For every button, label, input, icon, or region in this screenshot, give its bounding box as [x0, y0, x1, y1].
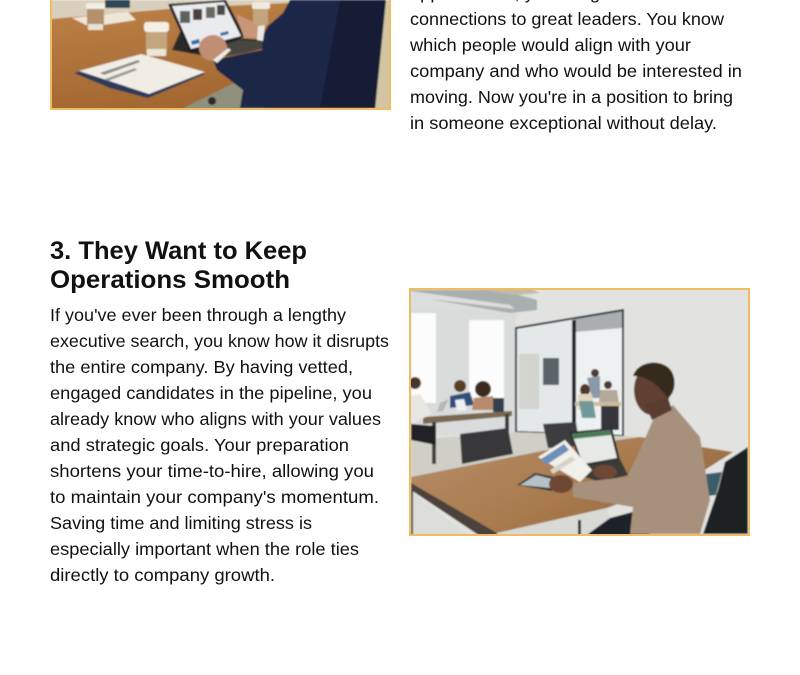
glass meeting room [518, 322, 571, 431]
text block: clipped paragraph, right column: in someone exceptional without delay. [410, 113, 717, 133]
tablet stand and keyboard [172, 31, 264, 56]
ceiling ducts [411, 290, 537, 313]
text block: executive search paragraph, left column: If you've ever been through a lengthy [50, 305, 346, 325]
photo: woman reviewing a report in an open-plan office [409, 288, 750, 536]
text block: executive search paragraph, left column: shortens your time-to-hire, allowing you [50, 461, 374, 481]
text block: clipped paragraph, right column: moving. Now you're in a position to bring [410, 87, 733, 107]
background team table [423, 411, 512, 424]
text block: executive search paragraph, left column: to maintain your company's momentum. [50, 487, 379, 507]
woman head [633, 375, 670, 416]
cup centre [145, 32, 168, 54]
text block: executive search paragraph, left column [50, 305, 389, 585]
tablet [168, 0, 245, 53]
text block: executive search paragraph, left column: the entire company. By having vetted, [50, 357, 353, 377]
floor [411, 432, 640, 480]
text block: executive search paragraph, left column: and strategic goals. Your preparation [50, 435, 349, 455]
woman hand holding report [549, 475, 573, 493]
heading: 3. They Want to Keep Operations Smooth [50, 237, 307, 294]
cup left [86, 8, 105, 28]
paper [72, 12, 136, 27]
woman dark trousers [588, 511, 650, 534]
paper report [538, 440, 592, 482]
text block: executive search paragraph, left column: executive search, you know how it disrupts [50, 331, 389, 351]
hands and cuffs [236, 14, 262, 38]
leadership pipeline folder [74, 54, 205, 98]
text block: executive search paragraph, left column: already know who aligns with your values [50, 409, 381, 429]
text block: clipped paragraph, right column: company and who would be interested in [410, 61, 742, 81]
text block: executive search paragraph, left column: Saving time and limiting stress is [50, 513, 312, 533]
background team people [409, 377, 421, 389]
text block: executive search paragraph, left column: engaged candidates in the pipeline, you [50, 383, 372, 403]
background chairs [460, 428, 513, 464]
suit jacket [213, 0, 342, 108]
text block: executive search paragraph, left column: especially important when the role ties [50, 539, 359, 559]
cup right [253, 3, 268, 25]
people in glass room [591, 369, 599, 377]
text block: clipped paragraph, right column: which people would align with your [409, 35, 691, 55]
woman blazer [573, 405, 710, 534]
text block: clipped paragraph, right column: connections to great leaders. You know [410, 9, 724, 29]
windows [411, 313, 436, 403]
heading: 3. They Want to Keep Operations Smooth: 3. They Want to Keep [50, 237, 307, 265]
main table [411, 437, 733, 533]
text block: executive search paragraph, left column: directly to company growth. [50, 565, 275, 585]
dark office chair [703, 447, 748, 534]
tablet on table [517, 473, 554, 491]
laptop [569, 428, 620, 467]
text block: clipped paragraph, right column [409, 0, 742, 133]
photo: boardroom table with tablet and leadership pipeline folder [50, 0, 391, 110]
heading: 3. They Want to Keep Operations Smooth: Operations Smooth [50, 266, 290, 294]
